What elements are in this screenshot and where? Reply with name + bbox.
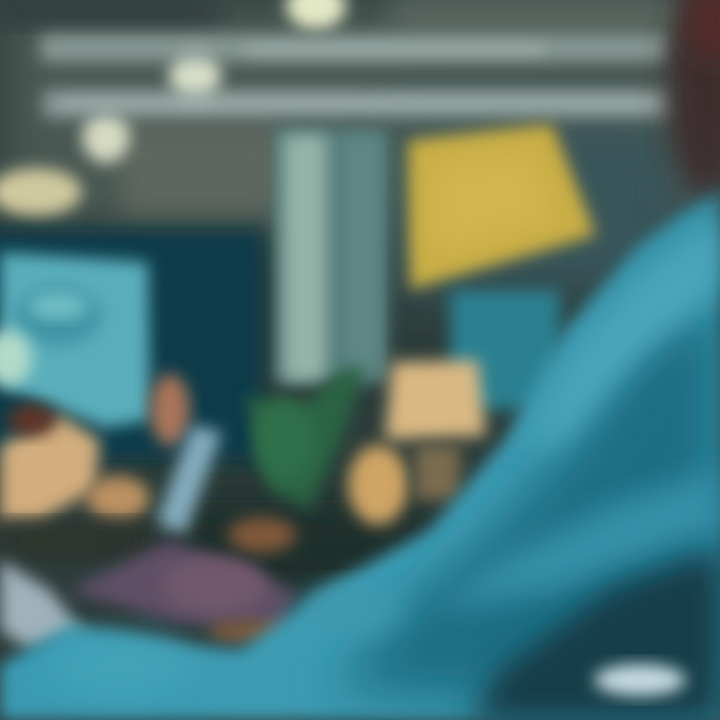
dark teal wall panel	[0, 230, 262, 460]
column	[274, 128, 388, 383]
person head, dark edge	[667, 0, 720, 195]
lamp and warm objects	[348, 360, 486, 525]
light teal screen	[0, 252, 150, 428]
blue sleeve	[0, 185, 720, 720]
hands and tablet	[0, 540, 295, 650]
white logo smudge	[594, 664, 686, 696]
blurred heading text bars	[40, 34, 674, 118]
yellow sticky note	[408, 124, 596, 290]
plant	[245, 365, 365, 510]
people at table	[0, 374, 296, 555]
ceiling lights	[0, 0, 346, 216]
teal block under note	[450, 290, 560, 410]
